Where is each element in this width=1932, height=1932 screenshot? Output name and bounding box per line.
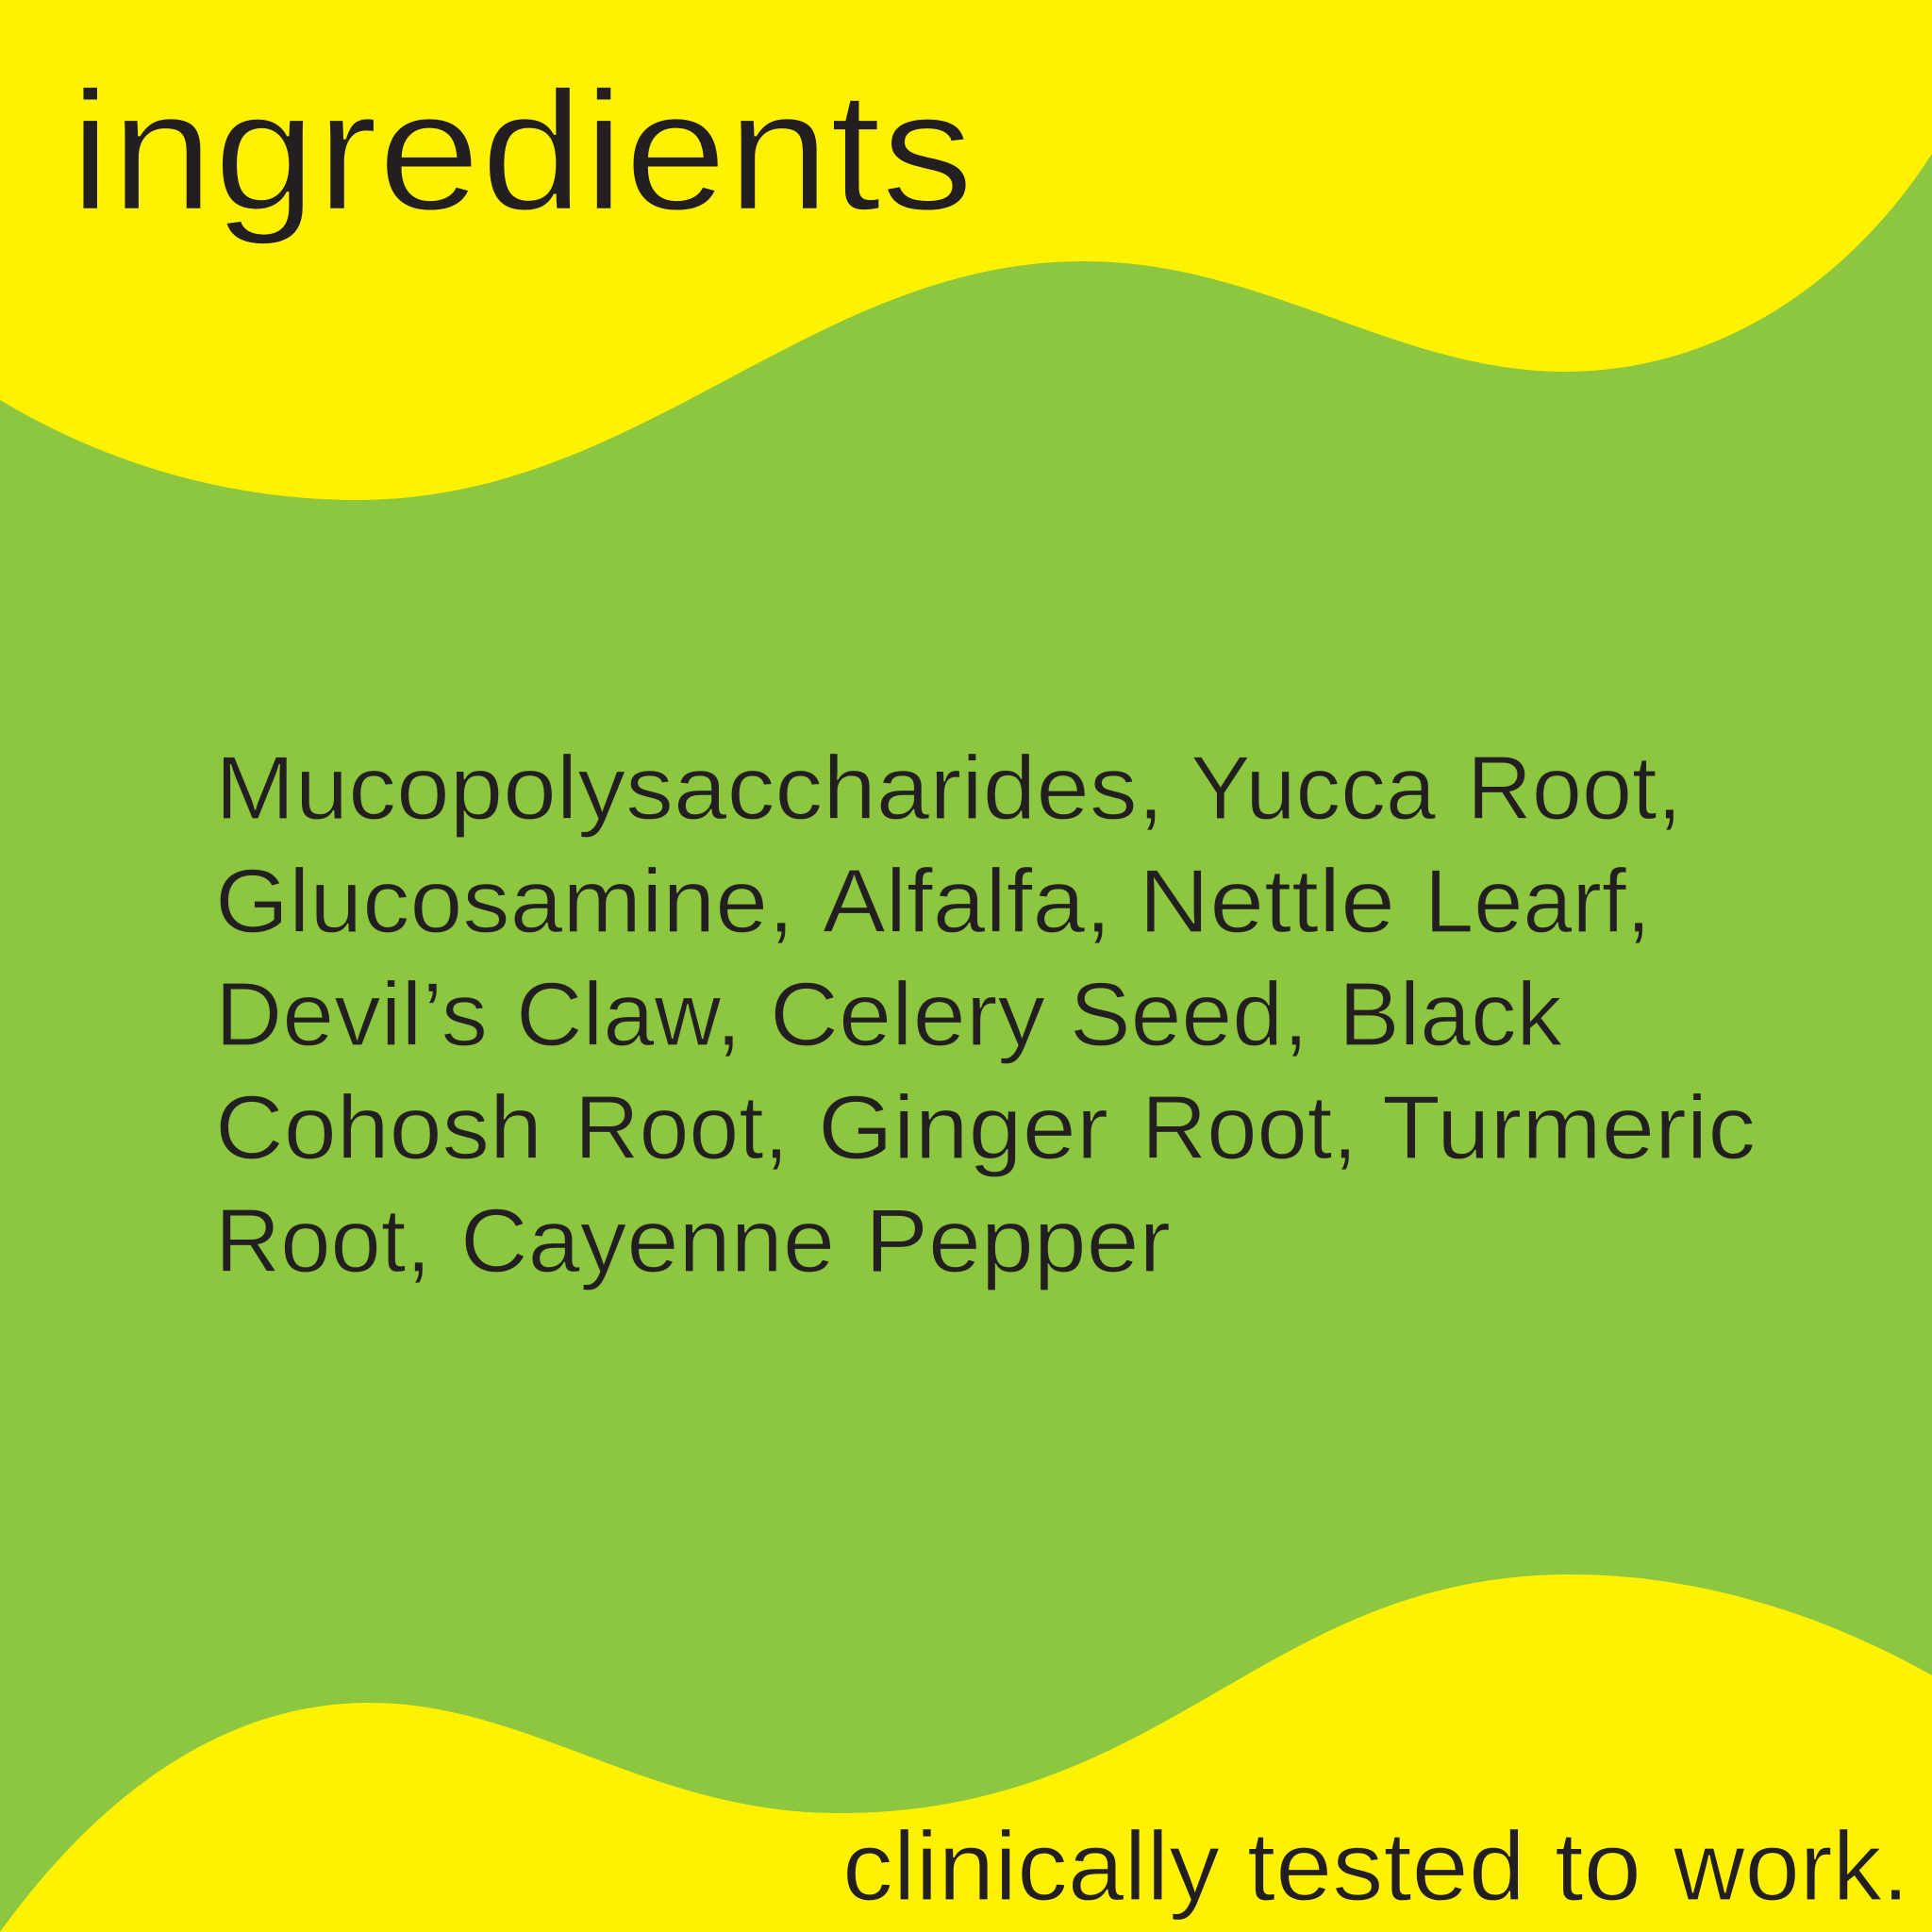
line 3: Seed, [1070, 964, 1308, 1065]
line 4: Root, [575, 1077, 789, 1178]
line 3: Celery [770, 964, 1045, 1065]
ingredients list [215, 738, 1756, 1291]
line 1 [215, 738, 1682, 839]
tagline: to [1555, 1812, 1641, 1922]
line 4: Cohosh [215, 1077, 542, 1178]
line 1: Root, [1467, 738, 1682, 839]
line 2: Learf, [1424, 851, 1651, 952]
line 5: Cayenne [460, 1191, 835, 1291]
line 2: Glucosamine, [215, 851, 794, 952]
line 2: Alfalfa, [823, 851, 1111, 952]
tagline: clinically [842, 1812, 1220, 1922]
tagline [842, 1812, 1909, 1922]
line 3: Black [1339, 964, 1563, 1065]
bottom yellow wave [0, 1574, 1932, 1932]
top yellow wave [0, 0, 1932, 500]
tagline: tested [1247, 1812, 1525, 1922]
line 4: Turmeric [1382, 1077, 1756, 1178]
line 4: Root, [1141, 1077, 1357, 1178]
line 5: Root, [215, 1191, 431, 1291]
line 3: Devil’s [215, 964, 488, 1065]
line 4 [215, 1077, 1756, 1178]
tagline: work. [1673, 1812, 1909, 1922]
line 2 [215, 851, 1651, 952]
title: ingredients [70, 57, 974, 246]
line 1: Yucca [1191, 738, 1437, 839]
line 3 [215, 964, 1563, 1065]
line 4: Ginger [818, 1077, 1108, 1178]
line 3: Claw, [516, 964, 741, 1065]
line 2: Nettle [1139, 851, 1395, 952]
line 1: Mucopolysaccharides, [215, 738, 1164, 839]
line 5: Pepper [865, 1191, 1171, 1291]
line 5 [215, 1191, 1171, 1291]
